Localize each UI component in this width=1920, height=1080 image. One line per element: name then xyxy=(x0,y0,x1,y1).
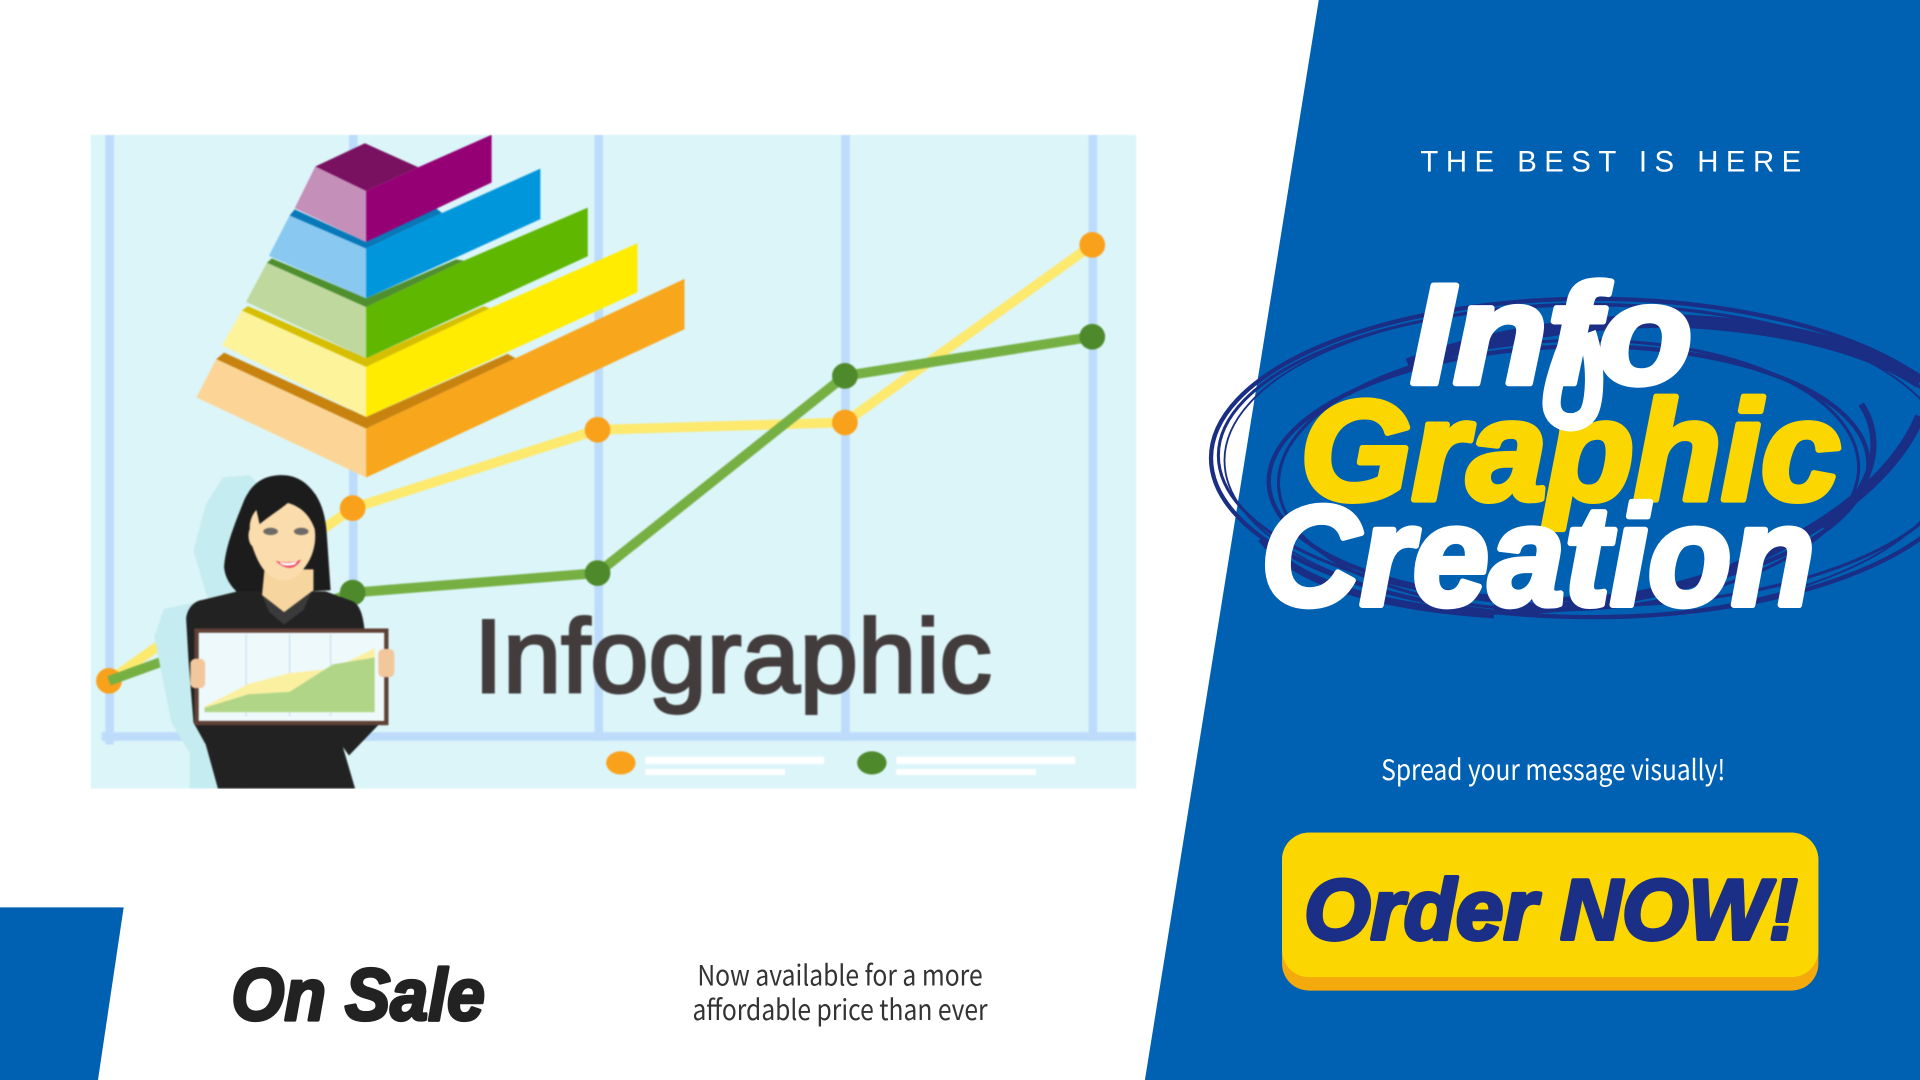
heading: Info Graphic Creation: Info xyxy=(1411,255,1692,414)
panel: blue right slanted background xyxy=(1145,0,1920,1080)
button: Order NOW: Order NOW! xyxy=(1304,862,1798,958)
legend: green series xyxy=(857,751,1075,775)
chart: green line series xyxy=(96,324,1105,694)
chart: yellow line series xyxy=(109,232,1105,681)
text: availability note: affordable price than ever xyxy=(692,988,988,1029)
text: Infographic wordmark: Infographic xyxy=(474,599,992,715)
icon: presenter figure holding a chart xyxy=(154,475,394,789)
decoration: scribbled ellipse rings xyxy=(1211,299,1920,620)
legend: orange series xyxy=(606,751,824,775)
text: tagline: THE BEST IS HERE xyxy=(1420,145,1801,178)
text: availability note xyxy=(692,954,988,1029)
text: On Sale: On Sale xyxy=(231,953,485,1036)
heading: Info Graphic Creation: Creation xyxy=(1261,477,1815,636)
button: Order NOW xyxy=(1282,833,1818,991)
text: message line: Spread your message visually! xyxy=(1381,748,1725,789)
text: availability note: Now available for a more xyxy=(697,954,983,995)
heading: Info Graphic Creation xyxy=(1261,255,1840,636)
panel: infographic illustration xyxy=(91,135,1136,789)
heading: Info Graphic Creation: Graphic xyxy=(1300,372,1840,531)
panel: blue bottom-left corner shape xyxy=(0,907,124,1080)
icon: layered 3D pyramid xyxy=(196,135,684,478)
